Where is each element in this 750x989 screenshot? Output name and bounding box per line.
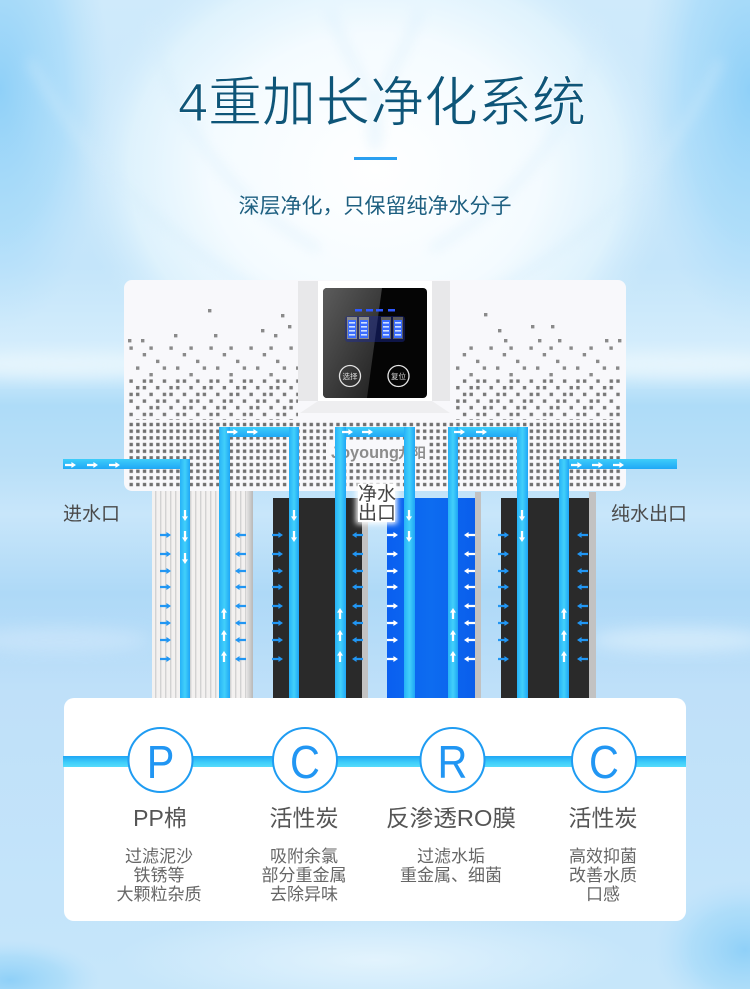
stage 3: RO membrane: R xyxy=(438,737,467,789)
perforated dots right xyxy=(450,313,622,488)
side flow arrows: RO membrane xyxy=(387,532,475,662)
stage 4: activated carbon: 高效抑菌 xyxy=(569,847,637,866)
stage 1: PP cotton: 过滤泥沙 xyxy=(125,847,193,866)
cartridge: PP cotton xyxy=(152,490,253,698)
stage 2: activated carbon: 去除异味 xyxy=(270,885,338,904)
stage 2: activated carbon: 吸附余氯 xyxy=(270,847,338,866)
title underline xyxy=(354,157,397,160)
panel: filter stages xyxy=(63,698,686,921)
stage 2: activated carbon: 活性炭 xyxy=(270,805,338,831)
select button: 选择 xyxy=(342,371,358,381)
stage 4: activated carbon xyxy=(568,728,638,904)
control display xyxy=(323,288,427,398)
perforated dots left xyxy=(128,309,298,488)
stage 1: PP cotton xyxy=(116,728,202,904)
center dots xyxy=(298,421,450,488)
cartridge: RO membrane xyxy=(387,492,481,698)
side flow arrows: carbon 1 xyxy=(272,532,363,662)
stage 4: activated carbon: 改善水质 xyxy=(569,866,637,885)
pipe: link 1 xyxy=(219,427,299,698)
label: pure water outlet: 纯水出口 xyxy=(611,503,687,525)
brand logo: 九阳 xyxy=(398,445,426,461)
white flow arrows in pipes xyxy=(65,429,624,662)
brand logo xyxy=(326,441,428,463)
cartridge: activated carbon 1 xyxy=(273,498,368,698)
pipe: pure water outlet xyxy=(559,459,677,698)
water pipes xyxy=(63,427,677,698)
pipe: inlet xyxy=(63,459,190,698)
reset button: 复位 xyxy=(391,371,406,381)
display indicator labels xyxy=(355,309,395,312)
stage 1: PP cotton: 大颗粒杂质 xyxy=(116,885,202,904)
stage 2: activated carbon xyxy=(262,728,346,904)
stage 3: RO membrane: 重金属、细菌 xyxy=(400,866,502,885)
filter cartridges xyxy=(152,490,596,698)
label: clean water outlet: 净水 xyxy=(358,483,396,505)
brand logo: Joyoung xyxy=(331,443,399,462)
side flow arrows: carbon 2 xyxy=(498,532,588,662)
stage 1: PP cotton: 铁锈等 xyxy=(134,866,184,885)
stage 1: PP cotton: PP棉 xyxy=(133,805,187,831)
stage 3: RO membrane: 反渗透RO膜 xyxy=(386,805,516,831)
stage 2: activated carbon: 部分重金属 xyxy=(262,866,346,885)
stage 4: activated carbon: 活性炭 xyxy=(568,805,638,831)
subtitle: 深层净化，只保留纯净水分子 xyxy=(238,195,512,218)
label: clean water outlet xyxy=(356,482,397,524)
cartridge: activated carbon 2 xyxy=(501,492,596,698)
pipe: link 3 xyxy=(448,427,528,698)
label: clean water outlet: 出口 xyxy=(358,502,396,524)
label: water inlet: 进水口 xyxy=(63,503,120,525)
filter level bars xyxy=(345,316,405,342)
stage 3: RO membrane xyxy=(386,728,516,885)
purifier panel xyxy=(124,280,626,491)
connecting band xyxy=(63,756,686,767)
stage 4: activated carbon: 口感 xyxy=(586,885,620,904)
title: 4重加长净化系统 xyxy=(178,73,586,133)
stage 1: PP cotton: P xyxy=(147,737,174,789)
stage 4: activated carbon: C xyxy=(589,737,619,789)
stage 2: activated carbon: C xyxy=(290,737,320,789)
side flow arrows: PP cotton xyxy=(160,532,246,662)
center console xyxy=(298,281,450,413)
pipe: link 2 xyxy=(335,427,415,698)
stage 3: RO membrane: 过滤水垢 xyxy=(417,847,485,866)
